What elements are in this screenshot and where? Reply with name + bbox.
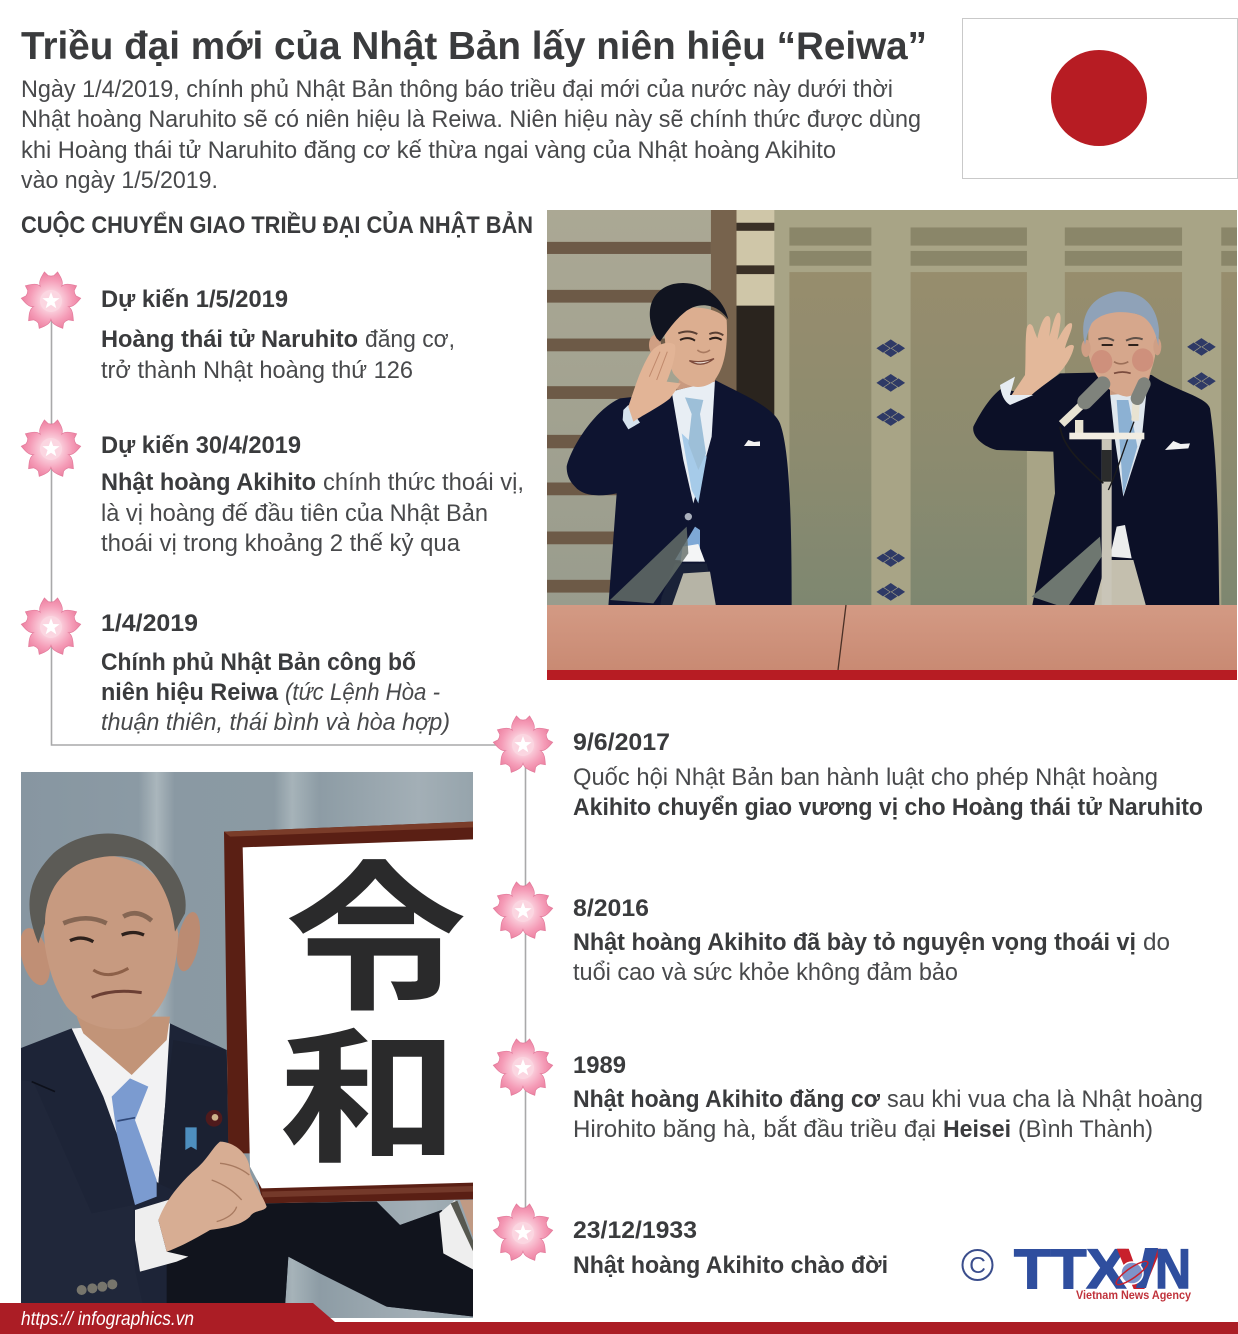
red band under photo [547, 670, 1237, 680]
icon: sakura 1 [20, 272, 82, 331]
event: 1989: Nhật hoàng Akihito đăng cơ [573, 1086, 881, 1113]
event: 8/2016: Nhật hoàng Akihito đã bày tỏ nguyện vọng thoái vị [573, 929, 1136, 956]
event: 9/6/2017 [573, 729, 1203, 821]
icon: sakura 3 [20, 598, 82, 657]
footer band [0, 1303, 1238, 1334]
event: 9/6/2017: Quốc hội Nhật Bản ban hành luật cho phép Nhật hoàng [573, 764, 1158, 791]
event: 1/4/2019: 1/4/2019 [101, 610, 198, 637]
event: 30/4/2019: Dự kiến 30/4/2019 [101, 432, 301, 459]
event: 9/6/2017: Akihito chuyển giao vương vị cho Hoàng thái tử Naruhito [573, 794, 1203, 821]
logo: TTXVN Vietnam News Agency: N [1155, 1237, 1191, 1300]
event: 23/12/1933: Nhật hoàng Akihito chào đời [573, 1252, 888, 1279]
event: 23/12/1933 [573, 1217, 888, 1279]
hand holding the board [135, 1142, 474, 1272]
logo: TTXVN Vietnam News Agency: TTX [1014, 1237, 1126, 1300]
photo: spokesman holding Reiwa calligraphy board [15, 772, 474, 1318]
logo: TTXVN Vietnam News Agency: C [969, 1252, 986, 1278]
timeline: upper column [20, 272, 524, 736]
intro text block: Nhật hoàng Naruhito sẽ có niên hiệu là Reiwa. Niên hiệu này sẽ chính thức được dùng [21, 106, 921, 133]
suit, shirt and tie [20, 1017, 474, 1317]
logo: TTXVN Vietnam News Agency: Vietnam News Agency [1076, 1290, 1192, 1302]
event: 1/4/2019: thuận thiên, thái bình và hòa hợp) [101, 709, 450, 736]
icon: sakura 5 [492, 882, 554, 941]
calligraphy characters: 和 [279, 982, 459, 1193]
icon: Japanese flag [962, 18, 1238, 178]
person: Naruhito [567, 283, 792, 607]
head [21, 834, 200, 1017]
icon: sakura 7 [492, 1204, 554, 1263]
event: 1/5/2019: Dự kiến 1/5/2019 [101, 286, 288, 313]
photo: Naruhito and Akihito on the balcony [547, 210, 1238, 673]
logo: TTXVN Vietnam News Agency [962, 1237, 1192, 1302]
event: 1989: 1989 [573, 1052, 626, 1079]
event: 1/4/2019: Chính phủ Nhật Bản công bố [101, 649, 416, 676]
event: 1989: Hirohito băng hà, bắt đầu triều đại [573, 1116, 936, 1143]
timeline: lower column [492, 716, 1203, 1279]
event: 1/4/2019: (tức Lệnh Hòa - [285, 679, 440, 706]
event: 8/2016: 8/2016 [573, 895, 649, 922]
event: 1/5/2019: Hoàng thái tử Naruhito [101, 326, 358, 353]
event: 30/4/2019: Nhật hoàng Akihito [101, 469, 316, 496]
event: 1989 [573, 1052, 1203, 1143]
icon: sakura 2 [20, 420, 82, 479]
event: 23/12/1933: 23/12/1933 [573, 1217, 697, 1244]
event: 30/4/2019: chính thức thoái vị, [323, 469, 524, 496]
timeline connector lines [52, 301, 526, 1233]
event: 9/6/2017: 9/6/2017 [573, 729, 670, 756]
event: 1989: (Bình Thành) [1018, 1116, 1153, 1143]
intro text block: vào ngày 1/5/2019. [21, 167, 218, 194]
event: 30/4/2019: là vị hoàng đế đầu tiên của Nhật Bản [101, 500, 488, 527]
event: 8/2016: do [1143, 929, 1170, 956]
person: Akihito with microphones [973, 292, 1219, 608]
board frame [224, 822, 473, 1203]
event: 8/2016 [573, 895, 1170, 986]
calligraphy characters [283, 859, 464, 1163]
logo: TTXVN Vietnam News Agency: V [1118, 1237, 1160, 1300]
event: 1/5/2019: trở thành Nhật hoàng thứ 126 [101, 357, 413, 384]
footer url: https:// infographics.vn [21, 1309, 194, 1330]
event: 1/5/2019: đăng cơ, [365, 326, 455, 353]
calligraphy characters: 令 [285, 810, 467, 1043]
title: Triều đại mới của Nhật Bản lấy niên hiệu “Reiwa” [21, 25, 927, 68]
event: 1/4/2019 [101, 610, 450, 736]
event: 8/2016: tuổi cao và sức khỏe không đảm bảo [573, 959, 958, 986]
event: 1/5/2019 [101, 286, 455, 384]
intro text block: khi Hoàng thái tử Naruhito đăng cơ kế thừa ngai vàng của Nhật hoàng Akihito [21, 137, 836, 164]
section heading: CUỘC CHUYỂN GIAO TRIỀU ĐẠI CỦA NHẬT BẢN [21, 210, 533, 239]
event: 30/4/2019: thoái vị trong khoảng 2 thế kỷ qua [101, 530, 461, 557]
intro text block: Ngày 1/4/2019, chính phủ Nhật Bản thông báo triều đại mới của nước này dưới thời [21, 76, 893, 103]
event: 30/4/2019 [101, 432, 524, 557]
intro text block [21, 76, 921, 194]
icon: sakura 6 [492, 1040, 554, 1098]
event: 1989: Heisei [943, 1116, 1011, 1143]
event: 1989: sau khi vua cha là Nhật hoàng [887, 1086, 1203, 1113]
event: 1/4/2019: niên hiệu Reiwa [101, 679, 279, 706]
icon: sakura 4 [492, 716, 554, 775]
balcony ledge [547, 605, 1237, 670]
